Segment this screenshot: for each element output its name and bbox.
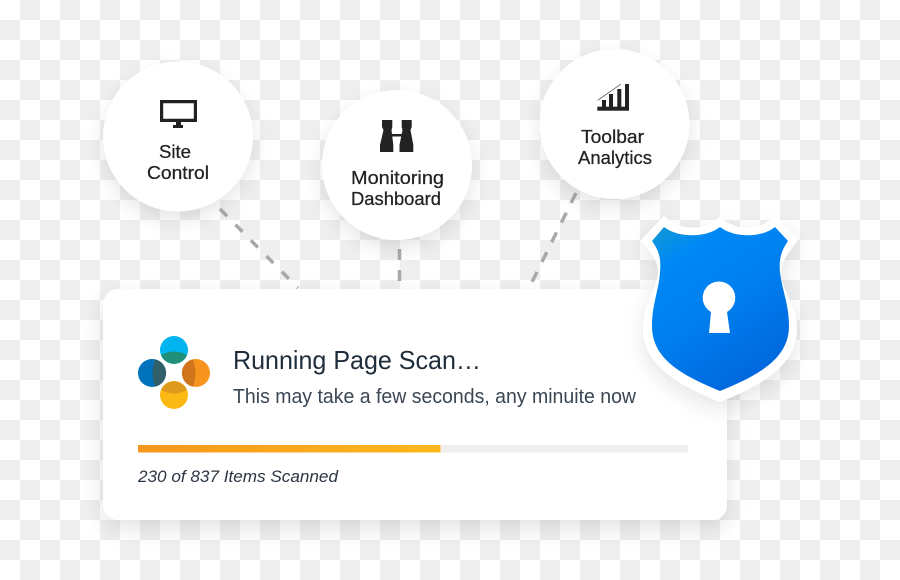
icon: monitor: [160, 100, 197, 128]
label: toolbar analytics: Analytics: [578, 148, 652, 168]
heading: running page scan: Running Page Scan…: [233, 345, 481, 375]
progress track: [138, 445, 688, 452]
connector: monitoring dashboard: [398, 249, 401, 288]
panel: scan card: [103, 289, 727, 520]
keyhole: [703, 281, 735, 333]
connector: toolbar analytics: [531, 193, 576, 284]
icon: binoculars: [380, 120, 413, 152]
icon: security shield: [641, 216, 798, 402]
label: site control: Site: [159, 142, 191, 162]
label: monitoring dashboard: Monitoring: [351, 168, 444, 188]
node: toolbar analytics: [540, 49, 690, 199]
node: monitoring dashboard: [322, 90, 472, 240]
progress fill: [138, 445, 440, 452]
node: site control: [103, 62, 253, 212]
progress label: 230 of 837 Items Scanned: [137, 467, 339, 486]
connector: site control: [220, 209, 298, 288]
logo: four circles: [138, 336, 210, 409]
icon: bar chart: [597, 84, 629, 111]
subtext: This may take a few seconds, any minuite now: [233, 386, 637, 408]
label: site control: Control: [147, 163, 209, 183]
label: toolbar analytics: Toolbar: [581, 127, 644, 147]
label: monitoring dashboard: Dashboard: [351, 189, 441, 209]
